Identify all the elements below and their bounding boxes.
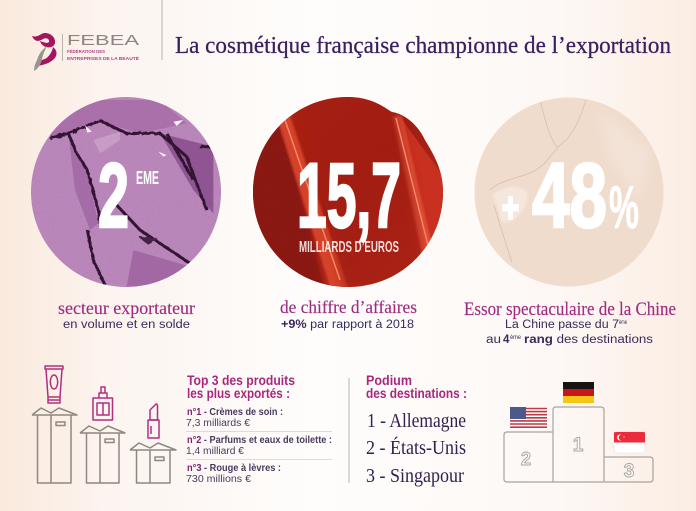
podium list (366, 373, 467, 487)
stat: 15,7: 15,7 (297, 145, 401, 247)
logo: FEBEA: FEBEA (67, 32, 139, 49)
item 3 (186, 463, 281, 485)
podium numbers: 3 (624, 461, 634, 482)
stat: 48: 48 (532, 145, 607, 247)
header divider (162, 0, 163, 60)
caption detail: 4 (503, 334, 510, 346)
top 3 products (186, 373, 332, 485)
heading: Podium (366, 373, 412, 388)
caption heading: de chiffre d’affaires (280, 297, 417, 317)
caption heading: Essor spectaculaire de la Chine (464, 299, 676, 320)
stat: plus sign: + (502, 184, 519, 231)
icon: lipstick (148, 404, 159, 438)
caption detail: au (486, 334, 501, 346)
podium numbers (521, 435, 634, 482)
destinations: 3 - Singapour (366, 465, 464, 487)
icon: box 2 (80, 426, 125, 483)
heading: Top 3 des produits (187, 373, 295, 388)
podium illustration (504, 382, 653, 482)
heading (187, 373, 295, 401)
panel: 2e secteur exportateur (31, 97, 221, 331)
item 2: 1,4 milliard € (186, 446, 244, 457)
item 2: n°2 - Parfums et eaux de toilette : (187, 435, 332, 446)
logo: FEBEA: FÉDÉRATION DES (67, 47, 105, 54)
pressed powder photo circle (31, 97, 221, 287)
cream texture photo circle (474, 97, 664, 287)
panel: 15,7 milliards d'euros (250, 95, 446, 331)
item 1 (186, 407, 283, 429)
caption detail: +9% par rapport à 2018 (281, 319, 414, 331)
caption detail: ème (619, 320, 627, 326)
flag: Singapore (614, 432, 645, 453)
section divider (348, 378, 350, 483)
item 3: 730 millions € (186, 474, 251, 485)
caption detail: La Chine passe du 7 (505, 319, 619, 331)
podium steps (504, 407, 653, 482)
icon: perfume (93, 387, 112, 420)
podium numbers: 2 (521, 449, 531, 469)
flag: Germany (563, 382, 594, 403)
logo: FEBEA: ENTREPRISES DE LA BEAUTÉ (67, 54, 139, 61)
stat: 2: 2 (98, 145, 129, 247)
icons: boxes with products (32, 366, 176, 483)
logo: FEBEA (32, 32, 139, 71)
destinations: 2 - États-Unis (366, 436, 466, 459)
destinations: 1 - Allemagne (367, 410, 466, 432)
item 2 (186, 435, 332, 457)
icon: box 3 (130, 443, 176, 483)
caption detail: en volume et en solde (63, 319, 190, 331)
caption heading: secteur exportateur (58, 298, 195, 318)
podium numbers: 1 (573, 435, 584, 456)
title: La cosmétique française championne de l’exportation (175, 33, 671, 59)
destinations (366, 410, 466, 487)
heading (366, 373, 467, 401)
caption detail (486, 319, 653, 346)
lipstick smear photo circle (250, 95, 446, 290)
stat: percent: % (609, 174, 639, 241)
panel: +48% Chine (464, 97, 676, 346)
caption detail: ème (510, 335, 522, 341)
caption detail: rang des destinations (524, 334, 653, 346)
heading: les plus exportés : (187, 386, 290, 401)
stat suffix: EME: EME (136, 168, 159, 188)
flag: USA (510, 407, 547, 428)
icon: box 1 (32, 408, 77, 483)
icon: cream tube (45, 366, 63, 403)
stat unit: MILLIARDS D’EUROS (299, 239, 399, 256)
heading: des destinations : (366, 386, 467, 401)
item 1: 7,3 milliards € (186, 418, 250, 429)
item 1: n°1 - Crèmes de soin : (187, 407, 283, 418)
item 3: n°3 - Rouge à lèvres : (187, 463, 281, 474)
